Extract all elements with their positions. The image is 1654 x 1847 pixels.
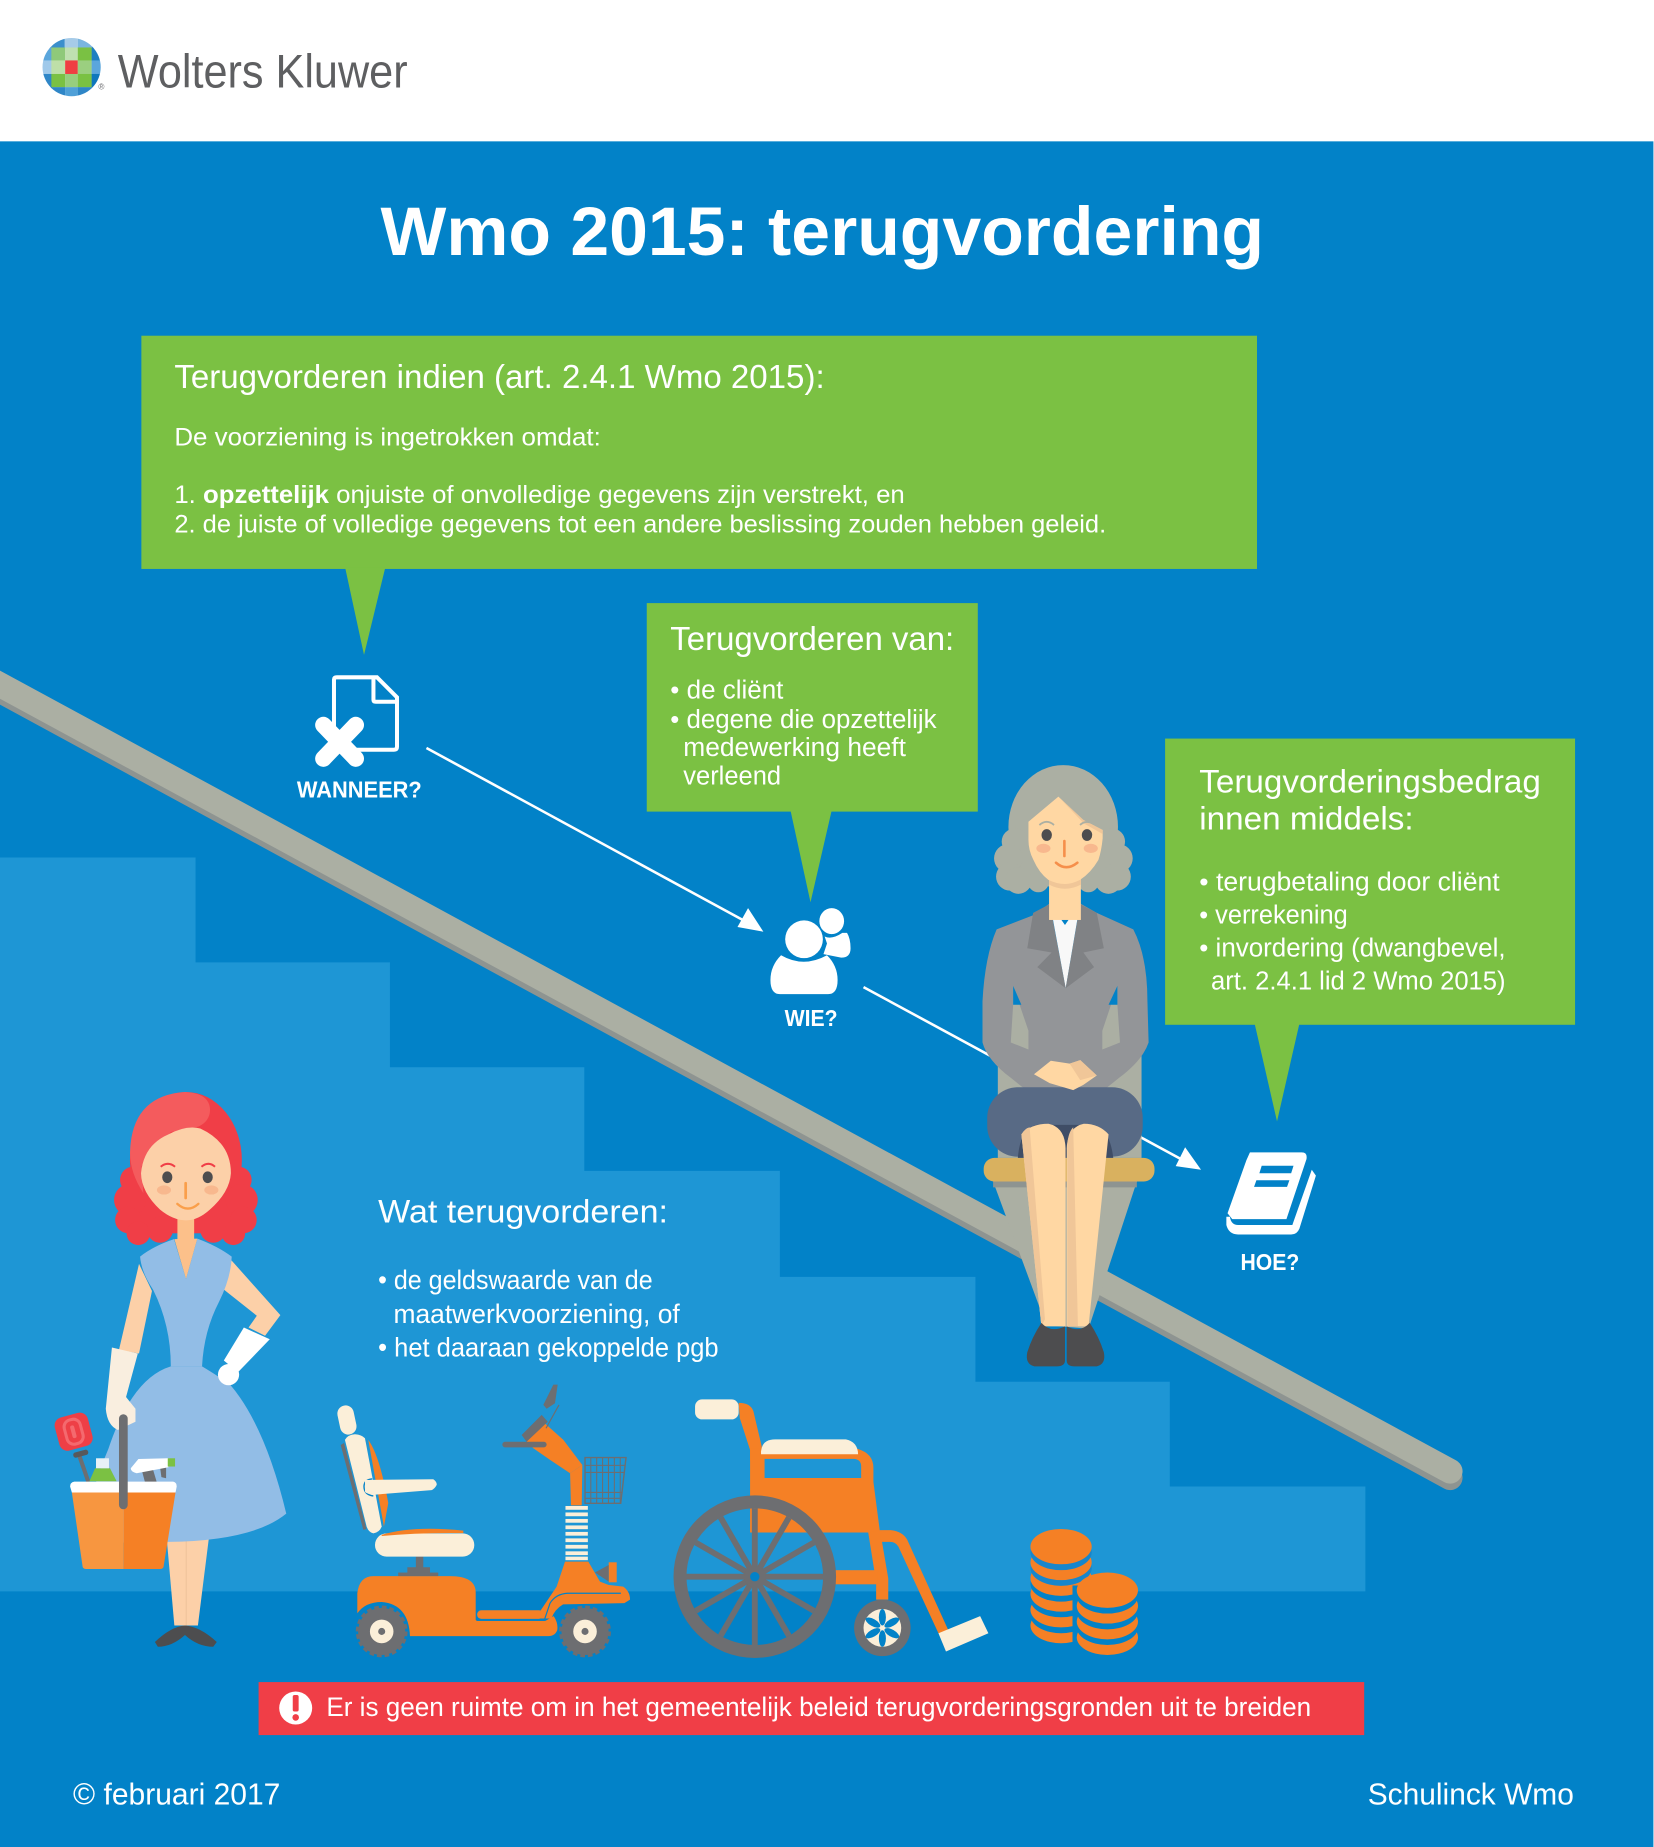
callout: wie: verleend (683, 763, 781, 791)
header band (0, 0, 1654, 141)
callout: hoe: art. 2.4.1 lid 2 Wmo 2015) (1211, 967, 1506, 995)
callout: hoe: • invordering (dwangbevel, (1199, 934, 1506, 962)
footer: source: Schulinck Wmo (1368, 1778, 1574, 1812)
callout: wie (647, 603, 978, 902)
callout: wanneer (141, 336, 1257, 655)
logo: Wolters Kluwer: ® (98, 83, 104, 92)
text: wat terugvorderen: • het daaraan gekoppelde pgb (378, 1332, 719, 1362)
stair background (0, 858, 1365, 1591)
label: wie: WIE? (785, 1005, 838, 1031)
icon: mobility scooter (336, 1385, 630, 1656)
icon: people (770, 908, 851, 994)
warning banner: Er is geen ruimte om in het gemeentelijk beleid terugvorderingsgronden uit te breiden (326, 1692, 1311, 1722)
stair rail (0, 666, 1450, 1478)
title: Wmo 2015: terugvordering (381, 193, 1264, 270)
icon: wheelchair (680, 1399, 988, 1656)
figure: woman with cleaning bucket (82, 1092, 286, 1647)
callout: wie: Terugvorderen van: (670, 620, 954, 657)
label: wanneer: WANNEER? (297, 776, 422, 802)
label: hoe: HOE? (1240, 1249, 1299, 1275)
callout: wie: medewerking heeft (683, 734, 907, 762)
icon: cleaning bucket (53, 1411, 177, 1569)
icon: coin stacks (1030, 1529, 1138, 1659)
callout: wie: • de cliënt (670, 677, 784, 705)
text: wat terugvorderen: Wat terugvorderen: (378, 1194, 668, 1230)
callout: wie: • degene die opzettelijk (670, 706, 937, 734)
text: wat terugvorderen: maatwerkvoorziening, of (393, 1299, 680, 1329)
text: wat terugvorderen (378, 1194, 719, 1362)
callout: wanneer: De voorziening is ingetrokken omdat: (174, 423, 601, 451)
callout: wanneer: 1. opzettelijk onjuiste of onvolledige gegevens zijn verstrekt, en (174, 481, 905, 509)
logo: Wolters Kluwer: Wolters Kluwer (118, 45, 408, 98)
arrow: wanneer to wie (426, 748, 763, 932)
text: wat terugvorderen: • de geldswaarde van de (378, 1265, 653, 1295)
warning banner (259, 1682, 1364, 1735)
callout: hoe: • terugbetaling door cliënt (1199, 869, 1500, 897)
arrow: wie to hoe (864, 987, 1201, 1170)
callout: hoe: • verrekening (1199, 902, 1348, 929)
callout: hoe (1165, 739, 1575, 1121)
logo: Wolters Kluwer (42, 38, 408, 98)
footer: date: © februari 2017 (73, 1778, 280, 1812)
callout: wanneer: 2. de juiste of volledige gegevens tot een andere beslissing zouden hebben geleid. (174, 510, 1106, 538)
callout: hoe: innen middels: (1199, 800, 1414, 836)
icon: book (1226, 1152, 1316, 1234)
callout: wanneer: Terugvorderen indien (art. 2.4.1 Wmo 2015): (174, 358, 825, 395)
icon: document with cross (323, 677, 397, 759)
callout: hoe: Terugvorderingsbedrag (1199, 764, 1541, 800)
figure: seated woman in grey suit (983, 765, 1155, 1366)
